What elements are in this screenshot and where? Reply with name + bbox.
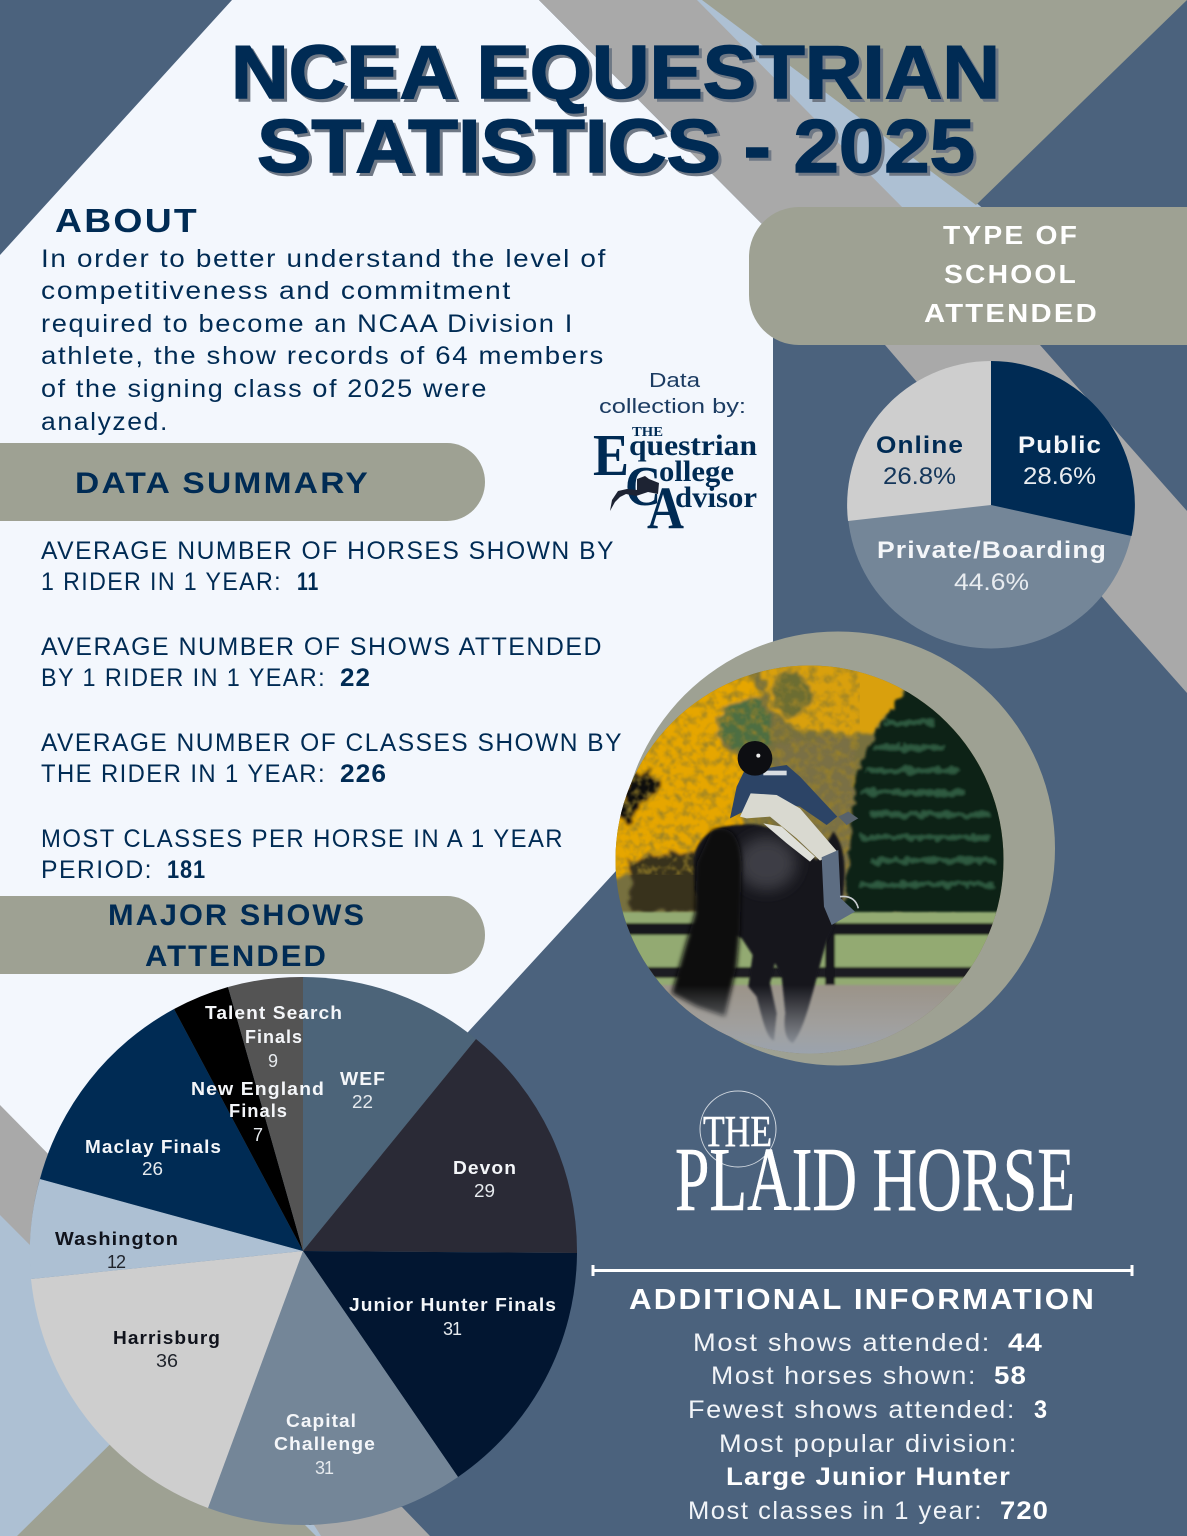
- stat: most classes per horse: PERIOD:: [41, 856, 153, 884]
- additional information list: Large Junior Hunter: [726, 1463, 1011, 1491]
- label: Harrisburg: Harrisburg: [113, 1328, 221, 1348]
- label: WEF: WEF: [340, 1069, 386, 1089]
- horse and rider: [672, 741, 858, 1043]
- stat: shows attended: AVERAGE NUMBER OF SHOWS ATTENDED: [41, 633, 603, 661]
- major shows pill: MAJOR SHOWS: [108, 899, 366, 932]
- data summary pill: DATA SUMMARY: [75, 467, 370, 500]
- additional information list: Most classes in 1 year:: [688, 1497, 983, 1525]
- about text block: analyzed.: [41, 408, 169, 436]
- major shows pill: ATTENDED: [145, 940, 328, 973]
- label: Junior Hunter Finals: Junior Hunter Finals: [349, 1295, 557, 1315]
- data summary pill: [0, 443, 485, 521]
- divider rule: [593, 1265, 1132, 1276]
- additional information list: 720: [1000, 1497, 1049, 1525]
- label: Devon: Devon: [453, 1158, 517, 1178]
- logo: The Equestrian College Advisor: ollege: [659, 455, 734, 488]
- pie chart: type of school: [847, 361, 1135, 648]
- stat: classes shown: 226: [340, 760, 387, 788]
- stat: horses shown: [41, 537, 615, 596]
- logo: The Plaid Horse: THE: [703, 1107, 772, 1156]
- gray band bottom: [300, 1507, 430, 1536]
- data collection credit: [599, 370, 746, 418]
- stat: horses shown: 1 RIDER IN 1 YEAR:: [41, 568, 282, 596]
- type of school pill: SCHOOL: [944, 259, 1078, 289]
- stat: most classes per horse: 181: [167, 856, 206, 884]
- sage triangle top right: [702, 0, 1187, 205]
- type of school pill: TYPE OF: [943, 220, 1079, 250]
- label: Harrisburg: [113, 1328, 221, 1371]
- additional information list: 44: [1008, 1329, 1043, 1357]
- sage circle behind photo: [621, 632, 1055, 1066]
- helmet: [738, 741, 772, 776]
- label: Capital Challenge: Challenge: [274, 1434, 376, 1454]
- label: New England Finals: Finals: [229, 1101, 288, 1121]
- gray band right: [885, 345, 1187, 693]
- label: Talent Search Finals: Finals: [245, 1027, 303, 1047]
- logo: The Equestrian College Advisor: E: [593, 422, 629, 488]
- label: Capital Challenge: [274, 1411, 376, 1478]
- label: Talent Search Finals: 9: [268, 1051, 278, 1071]
- gray band top: [539, 0, 950, 340]
- horse tail: [672, 828, 742, 1017]
- logo: The Equestrian College Advisor: C: [625, 456, 661, 518]
- data collection credit: collection by:: [599, 396, 746, 418]
- pie chart: type of school: 26.8%: [883, 463, 956, 490]
- stat: shows attended: [41, 633, 603, 692]
- label: New England Finals: New England: [191, 1079, 325, 1099]
- gray band bottom left: [0, 1105, 300, 1536]
- type of school pill: ATTENDED: [924, 298, 1099, 328]
- title: [231, 30, 1003, 191]
- logo: The Plaid Horse: [675, 1091, 1075, 1230]
- label: New England Finals: 7: [253, 1125, 263, 1145]
- title: NCEA EQUESTRIAN: [231, 30, 1000, 114]
- label: Washington: Washington: [55, 1229, 179, 1249]
- additional information list: Most popular division:: [719, 1430, 1018, 1458]
- stat: horses shown: 11: [297, 568, 319, 596]
- label: Maclay Finals: Maclay Finals: [85, 1137, 222, 1157]
- label: WEF: [340, 1069, 386, 1112]
- additional information heading: ADDITIONAL INFORMATION: [629, 1284, 1096, 1316]
- about text block: In order to better understand the level of: [41, 245, 607, 273]
- additional information list: [688, 1329, 1049, 1525]
- pie chart: type of school: Private/Boarding: [877, 537, 1107, 564]
- stat: horses shown: AVERAGE NUMBER OF HORSES SHOWN BY: [41, 537, 615, 565]
- light blue sliver bottom: [305, 1525, 321, 1536]
- pie chart: type of school: 44.6%: [954, 569, 1029, 596]
- photo: rider on horse in autumn paddock: [616, 666, 1004, 1054]
- additional information list: Fewest shows attended:: [688, 1396, 1016, 1424]
- stat: shows attended: BY 1 RIDER IN 1 YEAR:: [41, 664, 326, 692]
- about text block: competitiveness and commitment: [41, 277, 512, 305]
- logo: The Equestrian College Advisor: questrian: [629, 429, 757, 462]
- stat: most classes per horse: MOST CLASSES PER HORSE IN A 1 YEAR: [41, 825, 564, 853]
- label: Junior Hunter Finals: 31: [443, 1319, 462, 1339]
- label: Harrisburg: 36: [156, 1351, 178, 1371]
- stat: most classes per horse: [41, 825, 564, 884]
- logo: The Equestrian College Advisor: dvisor: [675, 481, 757, 514]
- stat: classes shown: [41, 729, 623, 788]
- data collection credit: Data: [649, 370, 701, 392]
- breeches: [740, 793, 837, 861]
- pie chart: type of school: Online: [876, 432, 964, 459]
- stat: classes shown: THE RIDER IN 1 YEAR:: [41, 760, 326, 788]
- title: STATISTICS - 2025: [260, 107, 978, 191]
- additional information list: 3: [1034, 1396, 1048, 1424]
- about text block: required to become an NCAA Division I: [41, 310, 574, 338]
- stat: shows attended: 22: [340, 664, 371, 692]
- label: Maclay Finals: [85, 1137, 222, 1179]
- stat: classes shown: AVERAGE NUMBER OF CLASSES SHOWN BY: [41, 729, 623, 757]
- label: WEF: 22: [352, 1092, 373, 1112]
- label: Capital Challenge: 31: [315, 1458, 334, 1478]
- label: Talent Search Finals: [205, 1003, 343, 1071]
- light blue band top: [697, 0, 985, 210]
- boot: [822, 850, 855, 925]
- label: Washington: 12: [107, 1252, 126, 1272]
- white content panel: [0, 0, 775, 1450]
- title: NCEA EQUESTRIAN: [234, 33, 1003, 117]
- about text block: of the signing class of 2025 were: [41, 375, 488, 403]
- major shows pill: [0, 896, 485, 974]
- about text block: [41, 245, 607, 436]
- additional information list: Most shows attended:: [693, 1329, 991, 1357]
- logo: The Equestrian College Advisor: A: [647, 475, 684, 541]
- pie chart: type of school: 28.6%: [1023, 463, 1096, 490]
- glove: [838, 812, 858, 825]
- label: Capital Challenge: Capital: [286, 1411, 357, 1431]
- label: Devon: 29: [474, 1181, 495, 1201]
- about heading: ABOUT: [55, 202, 199, 239]
- sage triangle bottom: [17, 1405, 320, 1536]
- title: STATISTICS - 2025: [257, 104, 975, 188]
- horse highlight: [737, 837, 797, 890]
- label: Junior Hunter Finals: [349, 1295, 557, 1339]
- saddle pad: [763, 823, 815, 862]
- pie chart: major shows attended: [30, 977, 577, 1525]
- horse body: [694, 824, 845, 1043]
- label: Devon: [453, 1158, 517, 1201]
- about text block: athlete, the show records of 64 members: [41, 342, 605, 370]
- label: Washington: [55, 1229, 179, 1272]
- additional information list: 58: [994, 1362, 1027, 1390]
- label: Maclay Finals: 26: [142, 1159, 163, 1179]
- logo: The Equestrian College Advisor: [593, 422, 757, 541]
- logo: The Equestrian College Advisor: THE: [632, 425, 663, 440]
- label: Talent Search Finals: Talent Search: [205, 1003, 343, 1023]
- pie chart: type of school: Public: [1018, 432, 1102, 459]
- jacket: [730, 765, 837, 825]
- label: New England Finals: [191, 1079, 325, 1145]
- additional information list: Most horses shown:: [711, 1362, 977, 1390]
- type of school pill: [749, 207, 1187, 345]
- light blue corner bottom left: [0, 1215, 320, 1536]
